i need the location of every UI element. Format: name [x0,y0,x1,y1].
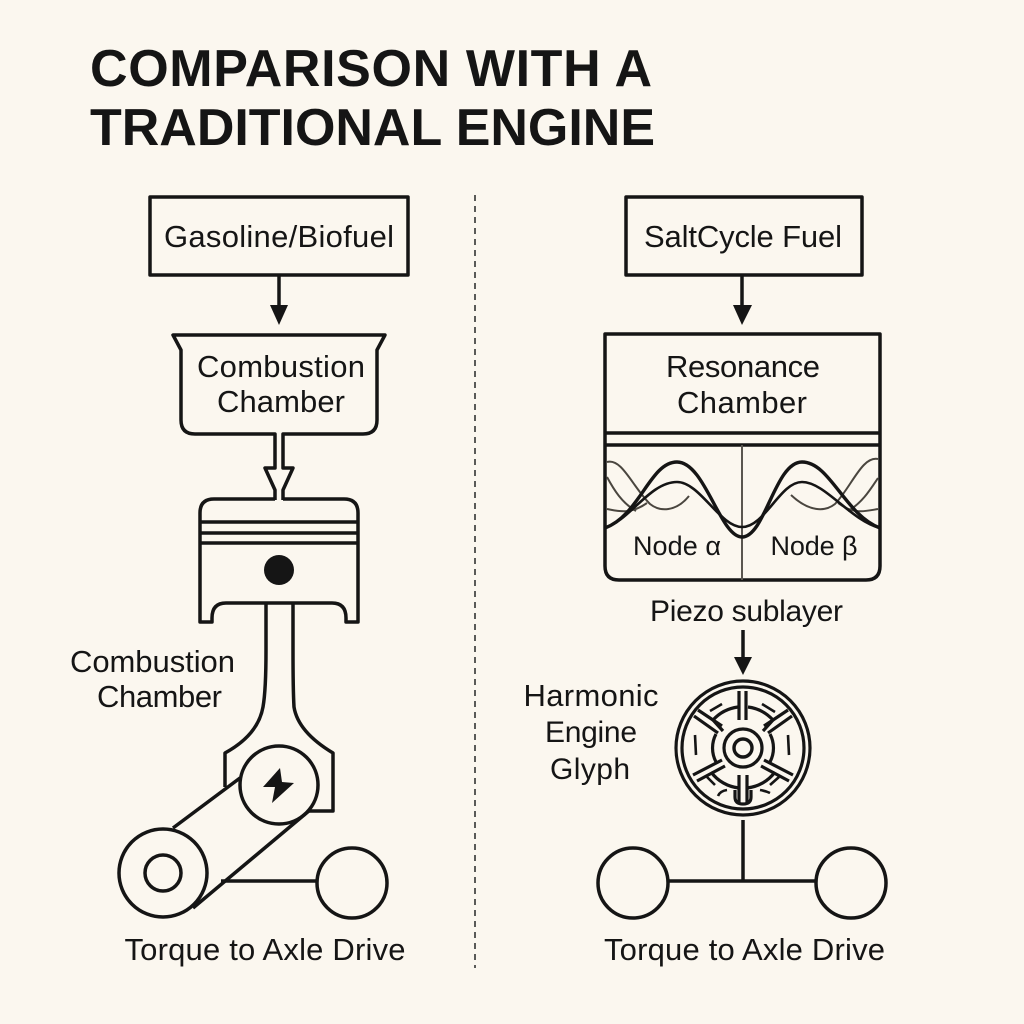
arrow: fuel to resonance chamber [733,275,752,325]
title: COMPARISON WITH A [90,40,652,98]
fuel box: gasoline/biofuel [150,197,408,275]
combustion chamber vessel [173,335,385,500]
resonance waves [605,459,880,537]
label: torque to axle drive: Torque to Axle Drive [604,932,885,967]
arrow: fuel to combustion chamber [270,275,288,325]
axle stem [741,820,745,881]
axle and wheels [598,848,886,918]
title: TRADITIONAL ENGINE [90,99,655,157]
piston [200,499,358,622]
crank arm [173,778,310,908]
icon: harmonic engine glyph [676,681,810,815]
axle and drive wheel [221,848,387,918]
resonance chamber: Node α [633,531,721,561]
arrow: piezo to harmonic glyph [734,630,752,675]
resonance chamber: Chamber [677,385,807,420]
label: combustion chamber: Combustion [70,644,235,679]
resonance chamber: Resonance [666,349,820,384]
label: piezo sublayer: Piezo sublayer [650,595,843,628]
combustion chamber vessel: Combustion [197,349,365,384]
fuel box: saltcycle fuel: SaltCycle Fuel [644,219,842,254]
inner arcs [711,707,775,788]
panel: saltcycle engine [524,197,886,967]
label: harmonic engine glyph: Harmonic [524,678,658,713]
crank wheel [119,829,207,917]
fuel box: saltcycle fuel [626,197,862,275]
combustion chamber vessel: Chamber [217,384,345,419]
connecting rod [225,603,333,811]
label: combustion chamber [70,644,235,714]
fuel box: gasoline/biofuel: Gasoline/Biofuel [164,219,394,254]
crank pin with lightning bolt [240,746,318,824]
resonance chamber [605,334,880,580]
title [90,40,655,157]
outer dashes [695,704,789,796]
label: harmonic engine glyph [524,678,658,786]
label: combustion chamber: Chamber [97,679,222,714]
label: harmonic engine glyph: Glyph [550,753,630,786]
resonance chamber: Node β [770,531,858,561]
label: torque to axle drive: Torque to Axle Drive [124,932,406,967]
spokes [693,691,793,804]
panel: traditional engine [70,197,408,967]
label: harmonic engine glyph: Engine [545,716,637,749]
